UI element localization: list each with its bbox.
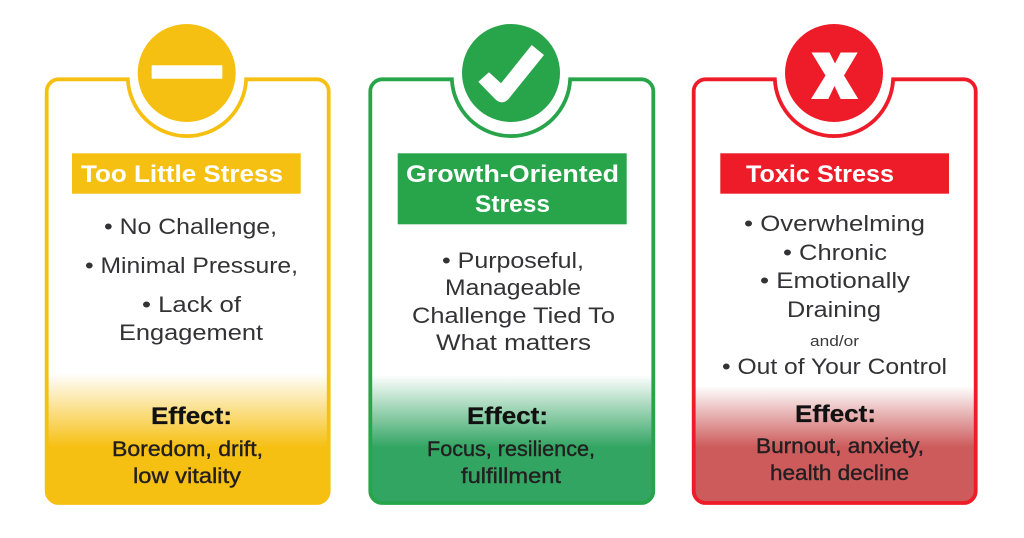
text block: growth-oriented stress bullets: What matters [436,330,591,355]
text block: toxic stress bullets: • Overwhelming [744,211,925,236]
heading: too little stress [72,153,301,194]
text block: growth-oriented stress effect: Effect: [467,403,548,430]
text block: toxic stress bullets [722,211,947,379]
text block: too little stress bullets: • Lack of [142,292,242,317]
heading: too little stress: Too Little Stress [81,161,283,188]
effect gradient background [47,373,329,503]
heading: growth-oriented stress: Growth-Oriented [406,161,619,188]
icon: check mark circle [462,24,560,122]
panel: too little stress [47,24,329,503]
text block: toxic stress bullets: and/or [810,334,859,350]
effect gradient background [371,375,653,503]
text block: too little stress bullets [85,214,298,345]
text block: too little stress effect: low vitality [133,464,241,488]
text block: too little stress bullets: Engagement [119,320,263,345]
text block: too little stress bullets: • No Challenge, [104,214,277,239]
text block: growth-oriented stress bullets: Manageable [445,275,581,300]
heading: growth-oriented stress: Stress [475,191,550,218]
text block: toxic stress bullets: • Out of Your Control [722,354,947,379]
text block: too little stress effect: Boredom, drift, [112,437,263,461]
text block: toxic stress effect: Effect: [795,401,876,428]
heading: toxic stress: Toxic Stress [746,161,894,188]
text block: toxic stress bullets: Draining [787,297,881,322]
text block: growth-oriented stress bullets: • Purposeful, [442,248,584,273]
card outline [47,79,329,503]
panel: growth-oriented stress [370,24,653,503]
heading: toxic stress [720,153,949,194]
text block: too little stress bullets: • Minimal Pressure, [85,253,298,278]
card outline [694,79,976,503]
text block: growth-oriented stress effect: Focus, resilience, [427,437,595,461]
text block: too little stress effect [112,403,263,488]
effect gradient background [694,386,976,503]
card outline [370,79,653,503]
text block: toxic stress bullets: • Emotionally [760,268,910,293]
text block: toxic stress effect [756,401,924,485]
text block: growth-oriented stress effect [427,403,595,488]
panel: toxic stress [694,24,976,503]
text block: growth-oriented stress bullets: Challenge Tied To [412,303,615,328]
icon: minus circle [138,24,236,122]
text block: toxic stress bullets: • Chronic [783,240,887,265]
icon: x circle [785,24,883,122]
text block: toxic stress effect: Burnout, anxiety, [756,434,924,458]
text block: toxic stress effect: health decline [770,461,909,485]
text block: growth-oriented stress effect: fulfillment [461,464,561,488]
text block: growth-oriented stress bullets [412,248,615,355]
heading: growth-oriented stress [398,153,627,224]
text block: too little stress effect: Effect: [151,403,232,430]
